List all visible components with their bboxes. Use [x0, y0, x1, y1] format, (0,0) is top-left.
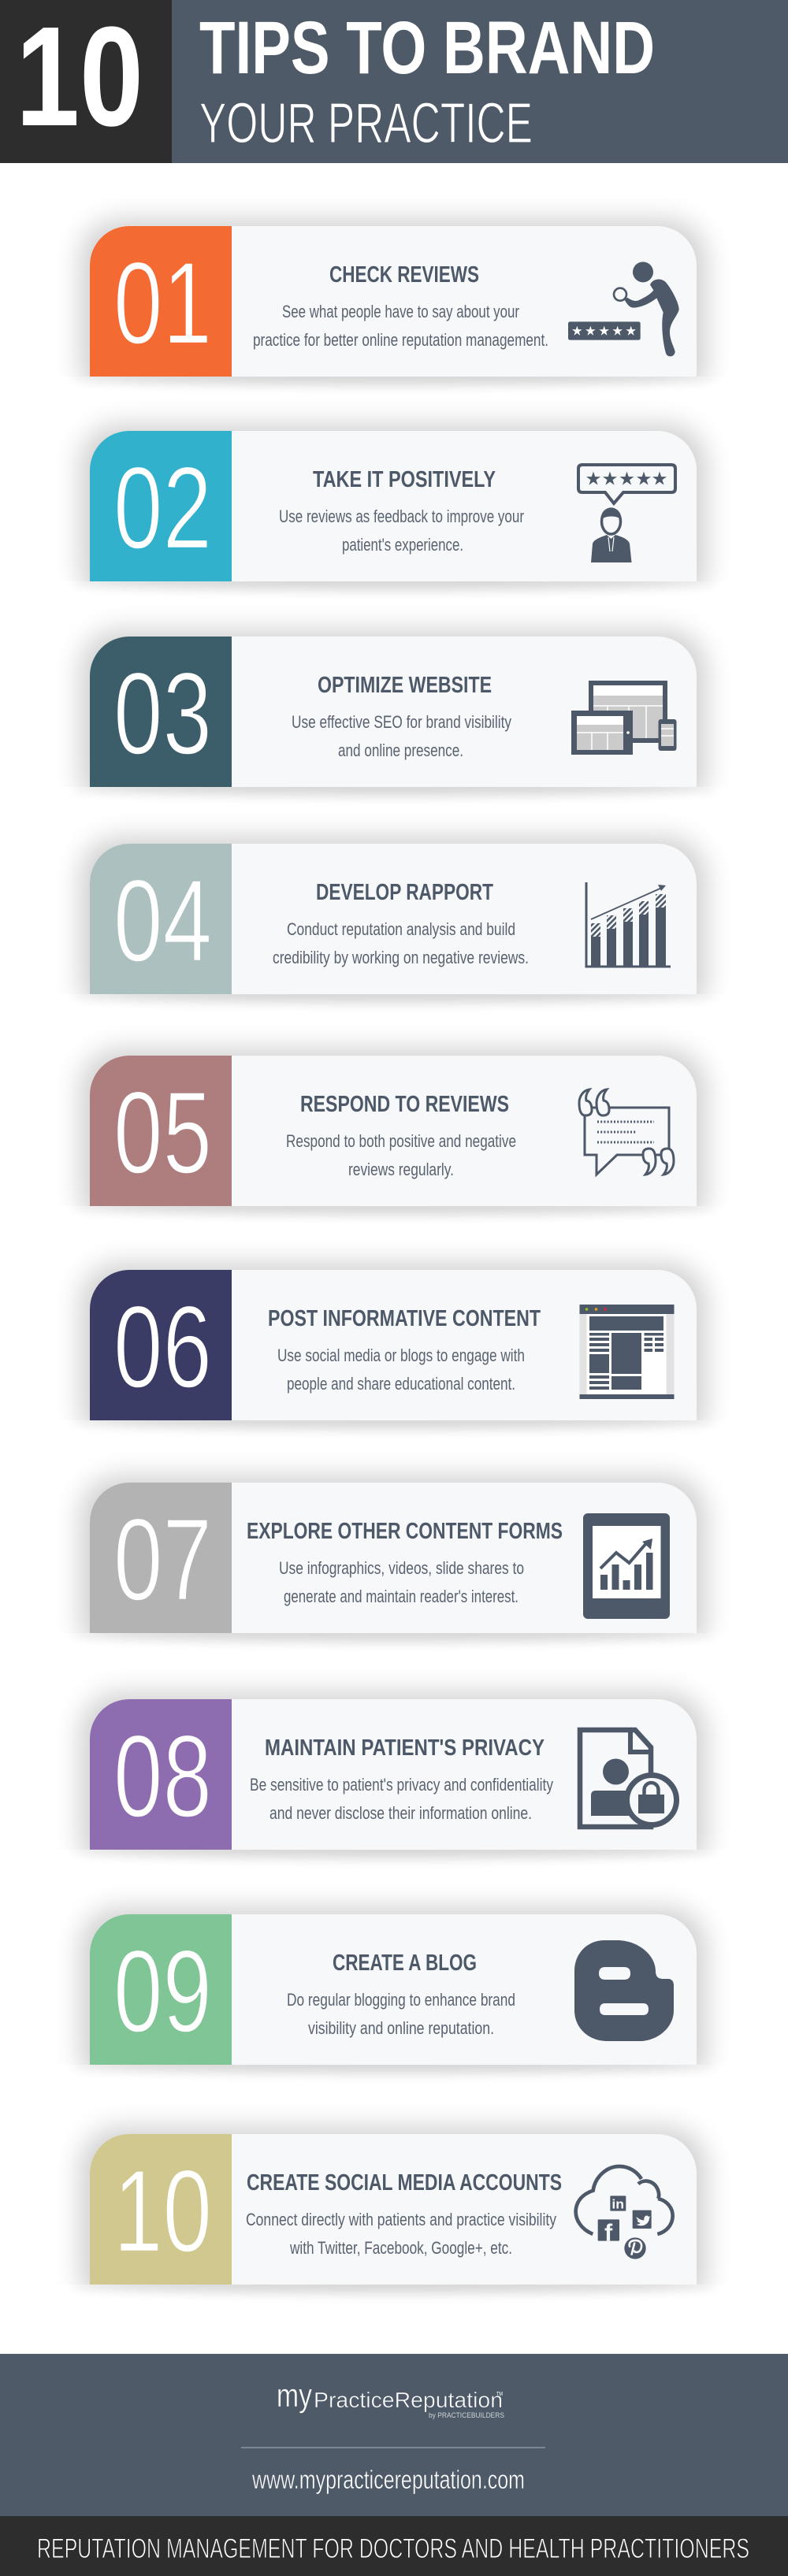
description — [253, 302, 548, 350]
tip card 06 — [71, 1264, 717, 1445]
number tab 07 — [90, 1483, 232, 1633]
heading: OPTIMIZE WEBSITE — [318, 673, 492, 698]
description: reviews regularly. — [348, 1160, 454, 1179]
heading: CREATE A BLOG — [333, 1951, 477, 1976]
description: patient's experience. — [342, 535, 463, 555]
tip card 09 — [71, 1908, 717, 2089]
heading: POST INFORMATIVE CONTENT — [268, 1306, 541, 1331]
heading: MAINTAIN PATIENT'S PRIVACY — [265, 1735, 545, 1761]
header banner — [0, 0, 788, 163]
description: generate and maintain reader's interest. — [284, 1587, 519, 1606]
icon: tablet with growth chart — [583, 1513, 670, 1619]
number tab 03 — [90, 637, 232, 787]
number tab 09: 09 — [113, 1925, 212, 2057]
icon: blogger logo — [574, 1940, 674, 2041]
description — [250, 1775, 553, 1823]
description — [273, 919, 529, 967]
logo: PracticeReputation — [314, 2388, 503, 2412]
number tab 01: 01 — [113, 237, 212, 369]
heading: RESPOND TO REVIEWS — [300, 1092, 509, 1117]
description — [286, 1131, 516, 1179]
description — [287, 1990, 515, 2038]
logo: by PRACTICEBUILDERS — [429, 2411, 504, 2419]
number tab 04 — [90, 844, 232, 994]
number tab 06 — [90, 1270, 232, 1420]
description: Respond to both positive and negative — [286, 1131, 516, 1151]
tip card 04 — [71, 837, 717, 1019]
description: Connect directly with patients and practice visibility — [246, 2210, 556, 2229]
description: Use infographics, videos, slide shares to — [279, 1558, 524, 1578]
tip card 01 — [71, 220, 717, 401]
icon: rising bar chart — [586, 882, 671, 967]
footer panel — [0, 2354, 788, 2516]
bottom tagline bar — [0, 2516, 788, 2576]
tip card 02 — [71, 425, 717, 606]
number tab 01 — [90, 226, 232, 377]
description — [279, 1558, 524, 1606]
icon: quote speech bubble — [579, 1089, 674, 1175]
description: Use reviews as feedback to improve your — [279, 507, 524, 526]
icon: person inspecting star rating — [568, 262, 679, 356]
description: Be sensitive to patient's privacy and confidentiality — [250, 1775, 553, 1795]
description: See what people have to say about your — [282, 302, 519, 321]
number tab 10: 10 — [113, 2145, 212, 2277]
number tab 07: 07 — [113, 1494, 212, 1625]
number tab 06: 06 — [113, 1281, 212, 1412]
icon: person with rating speech bubble — [578, 465, 675, 562]
title line 1: TIPS TO BRAND — [199, 6, 655, 90]
number tab 08 — [90, 1699, 232, 1850]
logo: my — [277, 2377, 312, 2414]
heading: CHECK REVIEWS — [329, 262, 479, 288]
number tab 09 — [90, 1914, 232, 2065]
number tab 10 — [90, 2134, 232, 2285]
description: and online presence. — [338, 741, 463, 760]
description: practice for better online reputation management. — [253, 330, 548, 350]
description: Use effective SEO for brand visibility — [292, 712, 511, 732]
icon: private patient document — [580, 1730, 676, 1827]
icon: social media cloud: f — [604, 2220, 613, 2247]
number tab 05: 05 — [113, 1067, 212, 1198]
logo — [277, 2377, 504, 2419]
description: credibility by working on negative reviews. — [273, 948, 529, 967]
description: people and share educational content. — [287, 1374, 515, 1394]
description — [277, 1346, 525, 1394]
description: visibility and online reputation. — [308, 2018, 494, 2038]
number tab 03: 03 — [113, 648, 212, 779]
title line 2: YOUR PRACTICE — [199, 92, 533, 155]
description — [279, 507, 524, 555]
icon: responsive devices — [571, 681, 676, 755]
header number block: 10 — [16, 0, 143, 156]
heading: DEVELOP RAPPORT — [316, 880, 493, 905]
heading: CREATE SOCIAL MEDIA ACCOUNTS — [247, 2170, 562, 2196]
icon: web page layout — [580, 1305, 675, 1399]
description: Conduct reputation analysis and build — [287, 919, 515, 939]
description: with Twitter, Facebook, Google+, etc. — [289, 2238, 512, 2258]
logo: TM — [496, 2392, 503, 2397]
description — [246, 2210, 556, 2258]
description: and never disclose their information online. — [269, 1803, 532, 1823]
website address: www.mypracticereputation.com — [251, 2465, 525, 2494]
tip card 05 — [71, 1049, 717, 1230]
description: Do regular blogging to enhance brand — [287, 1990, 515, 2010]
number tab 04: 04 — [113, 855, 212, 986]
number tab 02: 02 — [113, 442, 212, 573]
description — [292, 712, 511, 760]
number tab 02 — [90, 431, 232, 581]
tip card 10 — [71, 2128, 717, 2309]
heading: EXPLORE OTHER CONTENT FORMS — [247, 1519, 563, 1544]
icon: social media cloud: in — [611, 2197, 624, 2212]
description: Use social media or blogs to engage with — [277, 1346, 525, 1365]
heading: TAKE IT POSITIVELY — [313, 467, 496, 492]
tip card 07 — [71, 1476, 717, 1657]
number tab 08: 08 — [113, 1710, 212, 1842]
number tab 05 — [90, 1056, 232, 1206]
tip card 08 — [71, 1693, 717, 1874]
icon: social media cloud — [576, 2166, 673, 2259]
tip card 03 — [71, 630, 717, 811]
